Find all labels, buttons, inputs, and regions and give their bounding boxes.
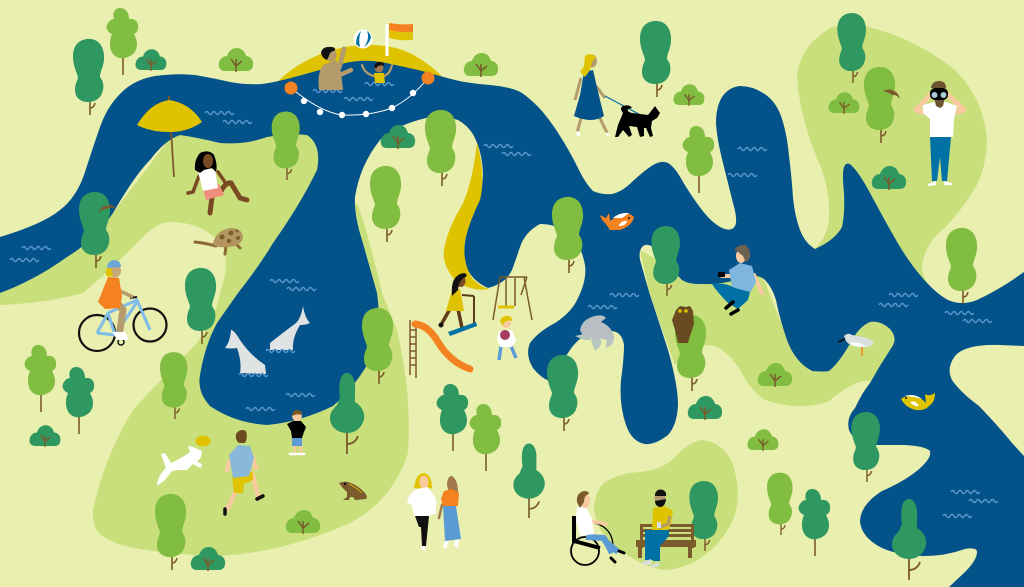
tree: [160, 352, 187, 419]
shrub: [381, 125, 415, 149]
bat: [883, 90, 900, 99]
tree: [552, 197, 583, 273]
wooden bench: [636, 524, 696, 558]
tree: [675, 315, 706, 391]
woman sitting on grass: [188, 151, 247, 213]
tree: [640, 21, 671, 97]
woman in orange: [439, 476, 461, 549]
dolphin: [225, 330, 266, 374]
shrub: [29, 425, 60, 447]
dog catching frisbee: [157, 436, 210, 486]
tree: [837, 13, 866, 83]
toddler with ball: [497, 316, 516, 360]
beach umbrella: [137, 96, 202, 177]
tree: [437, 384, 468, 451]
bat: [99, 205, 116, 213]
tree: [851, 412, 880, 482]
girl on scooter: [438, 273, 477, 336]
tree: [25, 345, 56, 412]
man sitting with phone: [712, 245, 762, 314]
shrub: [135, 49, 166, 71]
cyclist: [79, 260, 166, 351]
yellow beach top: [277, 45, 445, 82]
water ripples: [10, 82, 998, 518]
shrub: [219, 48, 253, 72]
child in water: [362, 62, 392, 83]
shrub: [828, 92, 859, 114]
man running: [225, 430, 263, 514]
slide and ladder: [410, 320, 470, 378]
woman in white: [407, 473, 436, 551]
shrub: [758, 363, 792, 387]
owl: [672, 306, 694, 343]
green meadow left: [0, 125, 409, 556]
tree: [470, 404, 501, 471]
shrub: [191, 547, 225, 571]
tree: [689, 481, 718, 551]
tree: [362, 308, 393, 384]
dolphin: [270, 306, 310, 350]
green meadow top right: [797, 26, 987, 293]
tree: [892, 499, 926, 580]
shrub: [673, 84, 704, 106]
shrub: [688, 396, 722, 420]
orange fish: [600, 213, 634, 230]
flag: [386, 23, 413, 56]
tree: [651, 226, 680, 296]
tree: [425, 110, 456, 186]
tree: [547, 355, 578, 431]
black dog: [615, 105, 660, 137]
tree: [370, 166, 401, 242]
shrub: [872, 166, 906, 190]
man sitting on bench: [642, 490, 673, 568]
green meadow centre right: [640, 250, 910, 406]
tree: [185, 268, 216, 344]
tree: [63, 367, 94, 434]
tree: [513, 443, 545, 518]
swing set: [493, 277, 532, 320]
tree: [272, 112, 300, 180]
yellow fish: [901, 393, 935, 410]
tree: [683, 126, 714, 193]
tree: [767, 473, 793, 535]
green meadow bench area: [594, 440, 738, 570]
tree: [107, 8, 138, 75]
tree: [79, 192, 110, 268]
woman walking dog: [574, 54, 650, 137]
tree: [864, 67, 895, 143]
buoy line: [284, 72, 434, 118]
shrub: [464, 53, 498, 77]
boy: [287, 410, 306, 454]
dolphin splash: [239, 350, 295, 376]
tree: [799, 489, 830, 556]
frog: [339, 482, 367, 500]
seal: [575, 315, 614, 351]
tree: [73, 39, 104, 115]
beach ball: [354, 30, 372, 48]
man in wheelchair: [571, 491, 624, 565]
tree: [330, 373, 364, 454]
tree: [155, 494, 186, 570]
turtle: [195, 228, 243, 254]
two women talking: [407, 473, 461, 551]
yellow sand strip: [444, 143, 490, 290]
shorebird: [838, 334, 874, 356]
man with binoculars: [916, 81, 964, 186]
man in water: [318, 47, 351, 90]
shrub: [747, 429, 778, 451]
tree: [946, 228, 977, 304]
shrub: [286, 510, 320, 534]
